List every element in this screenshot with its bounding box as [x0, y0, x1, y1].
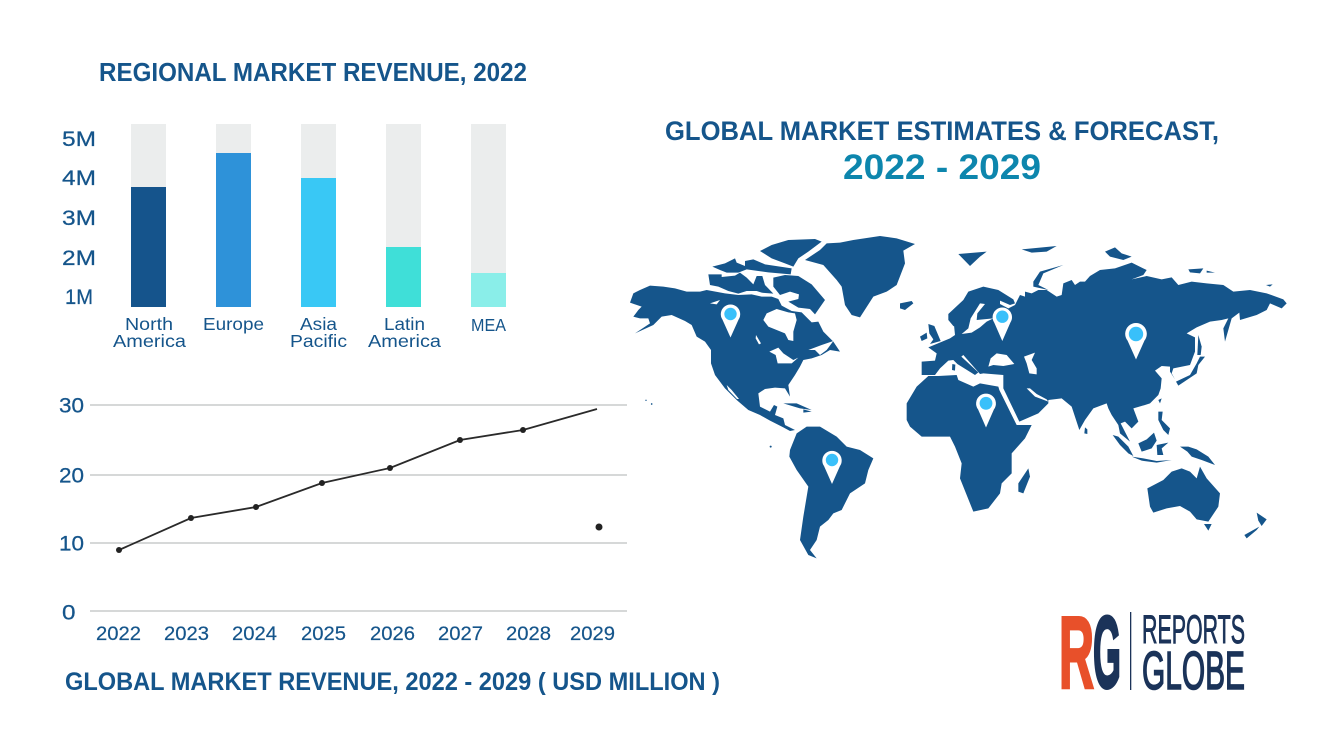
heading: global market estimates: GLOBAL MARKET ESTIMATES & FORECAST, [665, 116, 1219, 146]
x axis years: 2027 [438, 623, 483, 645]
oceania group [1113, 412, 1267, 538]
south america and greenland group [645, 236, 915, 558]
y axis values: 0 [62, 602, 76, 624]
category labels: North [125, 314, 173, 334]
arctic islands [958, 246, 1063, 290]
japan [1176, 357, 1205, 386]
y axis labels: 4M [62, 167, 96, 190]
y axis labels: 2M [62, 247, 96, 270]
sri lanka [1084, 427, 1087, 434]
y axis labels: 5M [62, 128, 96, 151]
north america group [630, 239, 840, 431]
x axis years [96, 623, 615, 645]
bar: Latin America [386, 124, 421, 307]
logo: reports globe: G [1093, 596, 1121, 710]
y axis values: 10 [59, 532, 84, 556]
eurasia and africa group [900, 246, 1287, 512]
north america mainland [630, 286, 840, 431]
logo wordmark: REPORTS [1142, 608, 1245, 652]
greenland [805, 236, 915, 317]
y axis labels: 3M [62, 207, 96, 230]
pin: south america [822, 451, 842, 484]
data points [116, 427, 602, 553]
pin: north america [721, 304, 740, 338]
y axis values: 20 [59, 464, 84, 488]
heading: regional market revenue: REGIONAL MARKET REVENUE, 2022 [99, 59, 527, 87]
bar: Europe [216, 124, 251, 307]
sakhalin [1197, 335, 1202, 355]
x axis years: 2022 [96, 623, 141, 645]
pin: asia [1125, 323, 1147, 360]
category labels [113, 314, 506, 351]
y axis values [59, 394, 84, 624]
sardinia [952, 364, 955, 371]
bar: North America [131, 124, 166, 307]
iceland [900, 301, 913, 310]
united kingdom [928, 324, 941, 344]
siberian islands [1105, 247, 1273, 287]
pin: europe [993, 308, 1012, 341]
x axis years: 2024 [232, 623, 277, 645]
logo wordmark: GLOBE [1142, 641, 1245, 701]
y axis labels: 1M [65, 286, 93, 309]
east asia islands group [1105, 247, 1273, 403]
y axis values: 30 [59, 394, 84, 418]
category labels: MEA [471, 315, 506, 335]
tasmania [1204, 524, 1212, 531]
arctic archipelago [708, 239, 825, 314]
line chart: global revenue [59, 394, 627, 645]
category labels: America [368, 331, 441, 351]
caribbean islands [783, 403, 812, 413]
eurasia [922, 263, 1287, 442]
bar: Asia Pacific [301, 124, 336, 307]
indonesia and philippines [1113, 412, 1215, 465]
x axis years: 2023 [164, 623, 209, 645]
category labels: America [113, 331, 186, 351]
category labels: Europe [203, 314, 264, 334]
bar: MEA [471, 124, 506, 307]
heading: global market revenue: GLOBAL MARKET REVENUE, 2022 - 2029 ( USD MILLION ) [65, 668, 720, 696]
logo monogram: R [1059, 596, 1094, 710]
africa [907, 375, 1032, 512]
revenue line [119, 409, 597, 550]
pacific specks [645, 400, 772, 448]
category labels: Asia [300, 314, 337, 334]
category labels: Pacific [290, 331, 347, 351]
madagascar [1018, 468, 1030, 493]
taiwan [1158, 398, 1162, 403]
world map [630, 236, 1287, 558]
australia [1147, 467, 1220, 522]
x axis years: 2025 [301, 623, 346, 645]
logo wordmark [1142, 608, 1245, 701]
heading: forecast years: 2022 - 2029 [843, 148, 1041, 187]
category labels: Latin [384, 314, 425, 334]
x axis years: 2029 [570, 623, 615, 645]
ireland [920, 333, 927, 341]
x axis years: 2026 [370, 623, 415, 645]
south america [789, 427, 873, 558]
y axis labels [62, 128, 96, 309]
inland seas [962, 303, 1048, 402]
hudson bay and lakes [710, 300, 833, 399]
bar chart: regional revenue [62, 124, 506, 351]
pin: africa [976, 394, 996, 428]
logo: reports globe [1059, 596, 1245, 710]
x axis years: 2028 [506, 623, 551, 645]
new zealand [1244, 513, 1267, 538]
